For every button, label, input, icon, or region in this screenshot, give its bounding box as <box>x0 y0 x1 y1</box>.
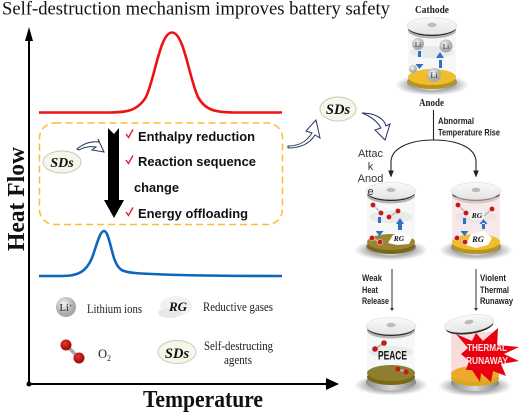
text: benefits list: Reaction sequence <box>138 154 256 169</box>
text: benefits list: Enthalpy reduction <box>138 129 255 144</box>
label: violent thermal runaway: Violent <box>480 273 506 283</box>
legend: self-destructing agents <box>158 339 274 367</box>
label: attack anode: Anod <box>358 173 383 185</box>
curved arrow: SDs to reaction <box>77 139 104 152</box>
legend: reductive gases: Reductive gases <box>203 300 273 314</box>
branching arrows <box>389 110 478 176</box>
label: weak heat release <box>362 273 389 306</box>
curved arrow: panel to SDs <box>288 120 320 148</box>
red curve <box>39 32 282 112</box>
SDs badge inside panel: SDs <box>50 156 74 171</box>
label: attack anode: Attac <box>358 148 384 160</box>
legend: self-destructing agents: SDs <box>165 346 189 362</box>
label: abnormal temperature rise: Temperature Rise <box>438 128 500 138</box>
legend: lithium ions: + <box>69 303 73 310</box>
label: weak heat release: Heat <box>362 285 378 295</box>
legend: O2 <box>60 340 111 364</box>
dashed panel <box>40 123 282 224</box>
label: weak heat release: Release <box>362 296 389 306</box>
legend: lithium ions: Li <box>59 303 69 314</box>
battery: without SDs: RG <box>471 211 483 220</box>
text: benefits list <box>126 129 256 221</box>
SDs badge top right <box>320 97 356 121</box>
legend: reductive gases <box>158 296 273 318</box>
label: abnormal temperature rise <box>438 116 500 138</box>
battery: thermal runaway: THERMAL <box>467 342 507 354</box>
label: violent thermal runaway: Runaway <box>480 296 513 306</box>
legend: self-destructing agents: Self-destructing <box>204 339 274 353</box>
battery: with SDs <box>354 182 428 260</box>
SDs badge inside panel <box>43 151 81 173</box>
label: weak heat release: Weak <box>362 273 383 283</box>
battery: thermal runaway: RUNAWAY <box>466 355 508 367</box>
label: attack anode: k <box>368 161 374 173</box>
battery: with SDs: RG <box>393 234 405 243</box>
arrow: violent thermal runaway <box>474 269 478 311</box>
battery: normal top <box>395 18 469 96</box>
legend: lithium ions <box>56 297 142 317</box>
label: violent thermal runaway <box>480 273 513 306</box>
y axis label: Heat Flow <box>4 146 30 251</box>
x axis label: Temperature <box>143 387 263 413</box>
battery: normal top: Li <box>415 41 421 49</box>
battery: normal top: Li <box>443 43 449 51</box>
legend: lithium ions: Lithium ions <box>87 302 142 316</box>
battery: without SDs <box>439 182 513 260</box>
big black arrow <box>104 128 124 218</box>
text: benefits list: change <box>134 180 179 195</box>
label: anode: Anode <box>419 98 444 109</box>
axes <box>25 27 339 390</box>
legend: O2: O <box>98 347 107 361</box>
legend: O2: 2 <box>107 354 111 363</box>
SDs badge top right: SDs <box>326 102 350 118</box>
arrow: weak heat release <box>390 269 394 311</box>
label: violent thermal runaway: Thermal <box>480 285 509 295</box>
text: benefits list: Energy offloading <box>138 206 248 221</box>
label: cathode: Cathode <box>415 5 450 16</box>
label: attack anode: e <box>367 186 374 198</box>
battery: normal top: Li <box>430 71 438 80</box>
label: attack anode <box>358 148 384 198</box>
legend: self-destructing agents: agents <box>224 353 252 367</box>
legend: reductive gases: RG <box>168 299 188 314</box>
battery: thermal runaway <box>438 312 519 396</box>
blue curve <box>39 231 282 276</box>
battery: peace <box>354 318 428 396</box>
curved arrow: SDs to attack anode <box>362 113 390 140</box>
label: abnormal temperature rise: Abnormal <box>438 116 474 126</box>
battery: without SDs: RG <box>471 234 485 244</box>
battery: peace: PEACE <box>378 350 407 362</box>
